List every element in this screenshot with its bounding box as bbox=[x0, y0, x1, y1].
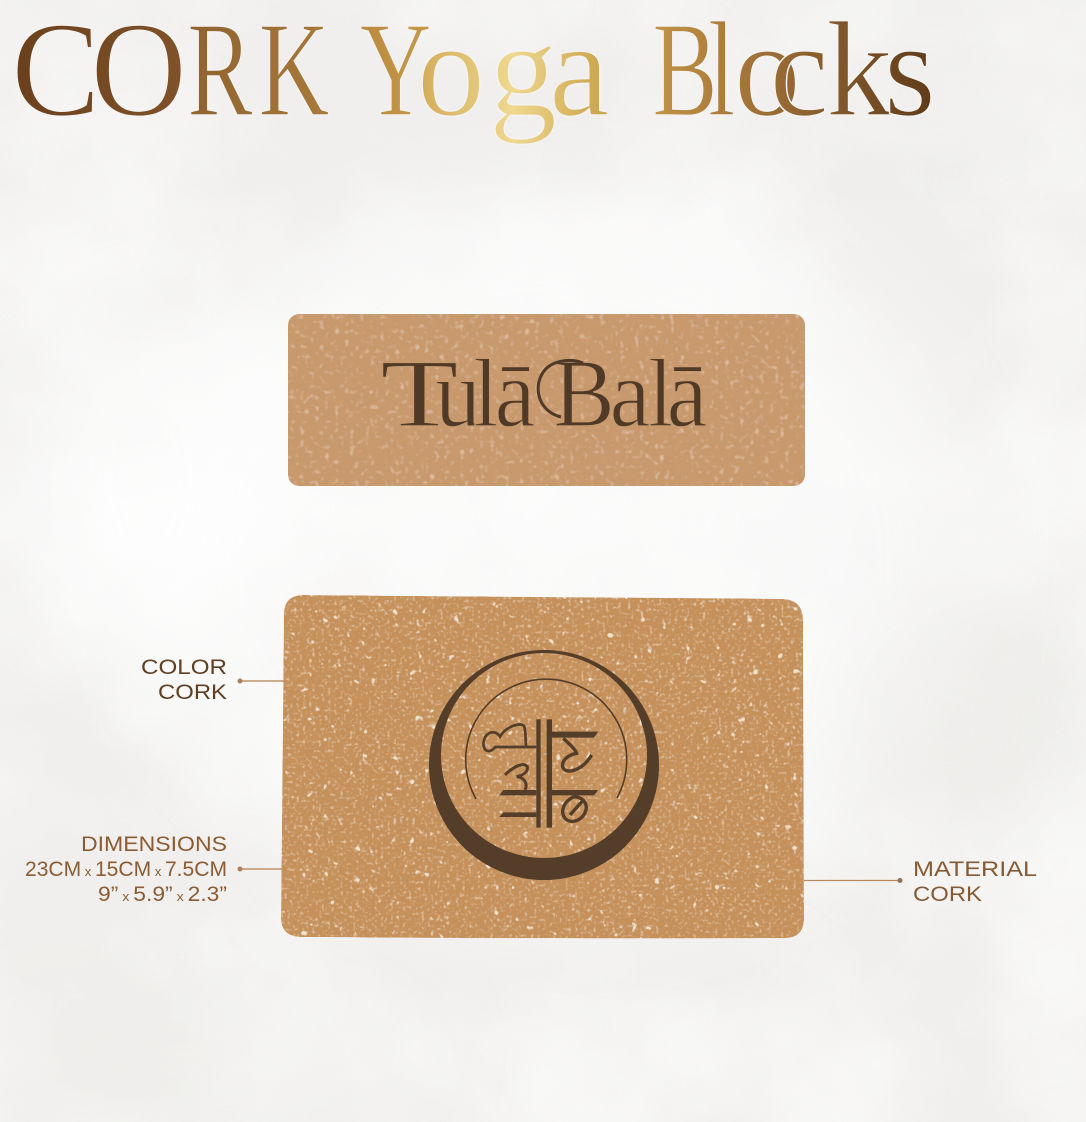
block shape: large face bbox=[281, 595, 804, 938]
callout: material: CORK bbox=[913, 883, 982, 906]
callout: dimensions bbox=[25, 833, 282, 906]
callout: color bbox=[141, 656, 285, 704]
callout: color: COLOR bbox=[141, 656, 227, 679]
block shape: narrow side bbox=[288, 314, 805, 486]
callout: dimensions: 9” x 5.9” x 2.3” bbox=[98, 883, 227, 906]
callout: material bbox=[804, 858, 1037, 906]
title: CORK Yoga Blocks bbox=[11, 0, 936, 145]
callout: dimensions: DIMENSIONS bbox=[81, 833, 227, 856]
wordmark: TulaBala: T bbox=[380, 339, 459, 447]
callout: material: MATERIAL bbox=[913, 858, 1037, 881]
panel: cork block front view with emblem bbox=[281, 595, 804, 938]
emblem: crescent and script mark bbox=[429, 650, 659, 880]
panel: cork block side view with wordmark bbox=[288, 314, 805, 486]
callout: dimensions: 23CM x 15CM x 7.5CM bbox=[25, 858, 227, 881]
callout: color: CORK bbox=[158, 681, 227, 704]
wordmark: TulaBala: ulāBalā bbox=[435, 341, 708, 448]
